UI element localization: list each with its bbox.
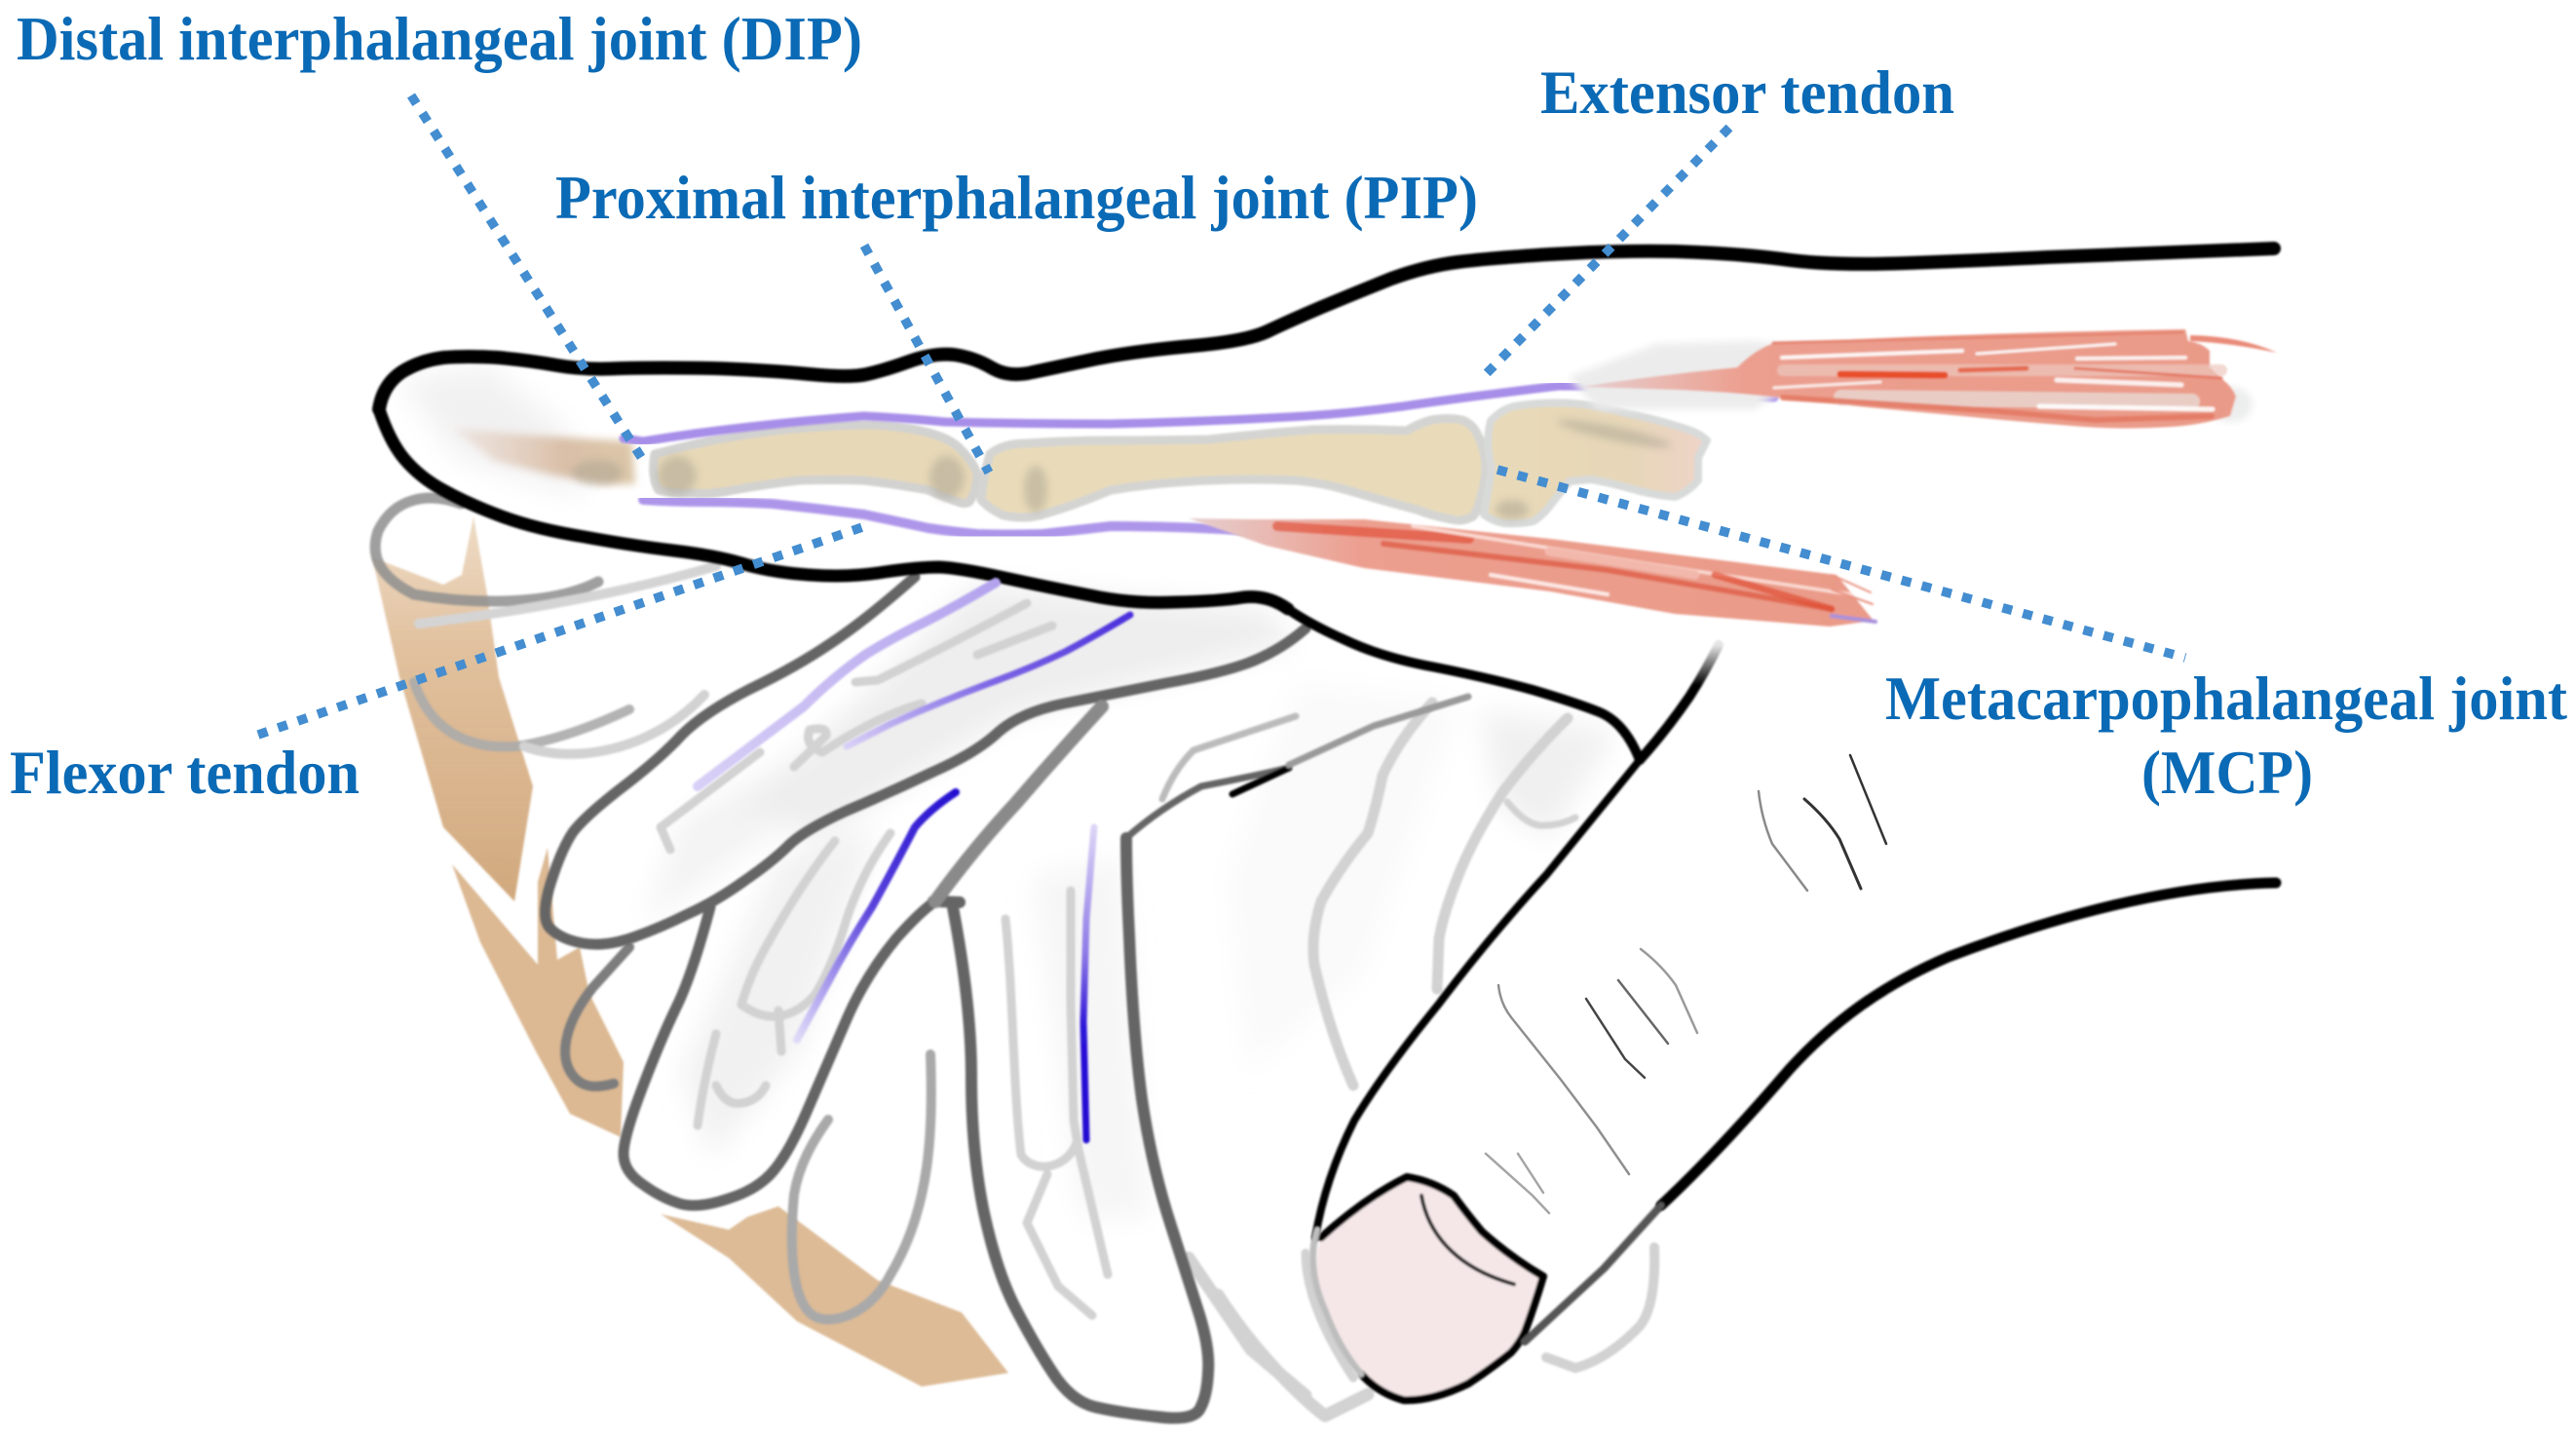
little finger knuckle line grey [1126,768,1289,838]
label: MCP line one: Metacarpophalangeal joint [1885,665,2567,733]
thumb nail [1313,1177,1661,1400]
light contour: second tip [524,695,704,754]
light contours in fingers [661,603,1654,1416]
bones [454,402,1707,523]
muscle tail [2190,335,2277,353]
leader lines [258,95,2185,735]
tendon: fourth finger [1083,827,1094,1140]
fingers outline [546,577,1468,1418]
tan shape middle [452,848,624,1137]
ghost contour: upper finger tip [375,498,598,601]
palm edge outline [1288,609,1640,760]
tan shape upper [372,516,533,901]
leader: DIP [411,95,646,465]
thumb wrinkles [1486,755,1886,1213]
leader: extensor tendon [1487,128,1729,373]
muscle fibres [1773,332,2221,420]
ghost finger contours [375,498,1654,1416]
thumb upper outline [1315,760,1640,1237]
label: extensor tendon: Extensor tendon [1540,58,1954,127]
index finger palmar outline [379,409,1288,609]
hand outline [379,248,2276,1237]
ghost contour: second tip [414,682,629,746]
metacarpal bone [1484,402,1707,523]
nail plate [1316,1177,1543,1400]
muscle belly [1581,329,2236,429]
little finger knuckle line black [1232,768,1289,794]
palm band between fingers [935,706,1102,901]
flexor tendon [643,500,1254,534]
index finger dorsal outline [379,248,2274,409]
tendon: second finger pale [698,583,996,786]
label: DIP: Distal interphalangeal joint (DIP) [17,5,862,73]
bone shading spots [572,415,1673,519]
second finger outline [546,577,1306,944]
leader: flexor tendon [258,524,871,735]
tan shapes: distal finger pads [372,516,1008,1387]
tendon: third finger [797,792,956,1040]
knuckle trace [1162,716,1296,799]
nail cuticle [1421,1196,1514,1284]
thumb lower outline [1661,883,2276,1205]
ghost contour: third tip [565,947,629,1086]
third finger outline [624,901,935,1205]
flexor muscle [1189,518,1875,627]
leader: MCP [1497,470,2185,658]
muscle fibres [1277,526,1875,622]
grey sheath behind muscle [1569,341,1851,409]
fourth finger outline [933,838,1208,1418]
leader: PIP [864,246,989,473]
finger tendons [698,583,1130,1140]
soft grey shading of hand [399,365,1617,1218]
light contour: upper finger [419,566,716,624]
label: flexor tendon: Flexor tendon [10,739,360,807]
distal phalanx bone [454,429,635,484]
thumb edge to nail [1525,1205,1661,1342]
labels [10,5,2567,807]
proximal phalanx bone [981,419,1486,520]
ghost contour: fourth tip [792,1054,931,1319]
extensor tendon [624,386,1774,441]
little finger line to thumb [1289,697,1468,765]
nail outline [1321,1177,1543,1400]
thumb dorsal outline [1640,645,1719,760]
tendon: second finger blue [847,615,1130,746]
tan shape lower [661,1206,1008,1387]
label: PIP: Proximal interphalangeal joint (PIP) [555,164,1478,232]
grey sheath at muscle end [2210,387,2253,422]
muscle belly [1189,518,1874,627]
middle phalanx bone [654,425,977,503]
extensor muscle [1569,329,2277,429]
label: MCP line two: (MCP) [2141,739,2313,807]
nail left edge [1313,1230,1361,1374]
